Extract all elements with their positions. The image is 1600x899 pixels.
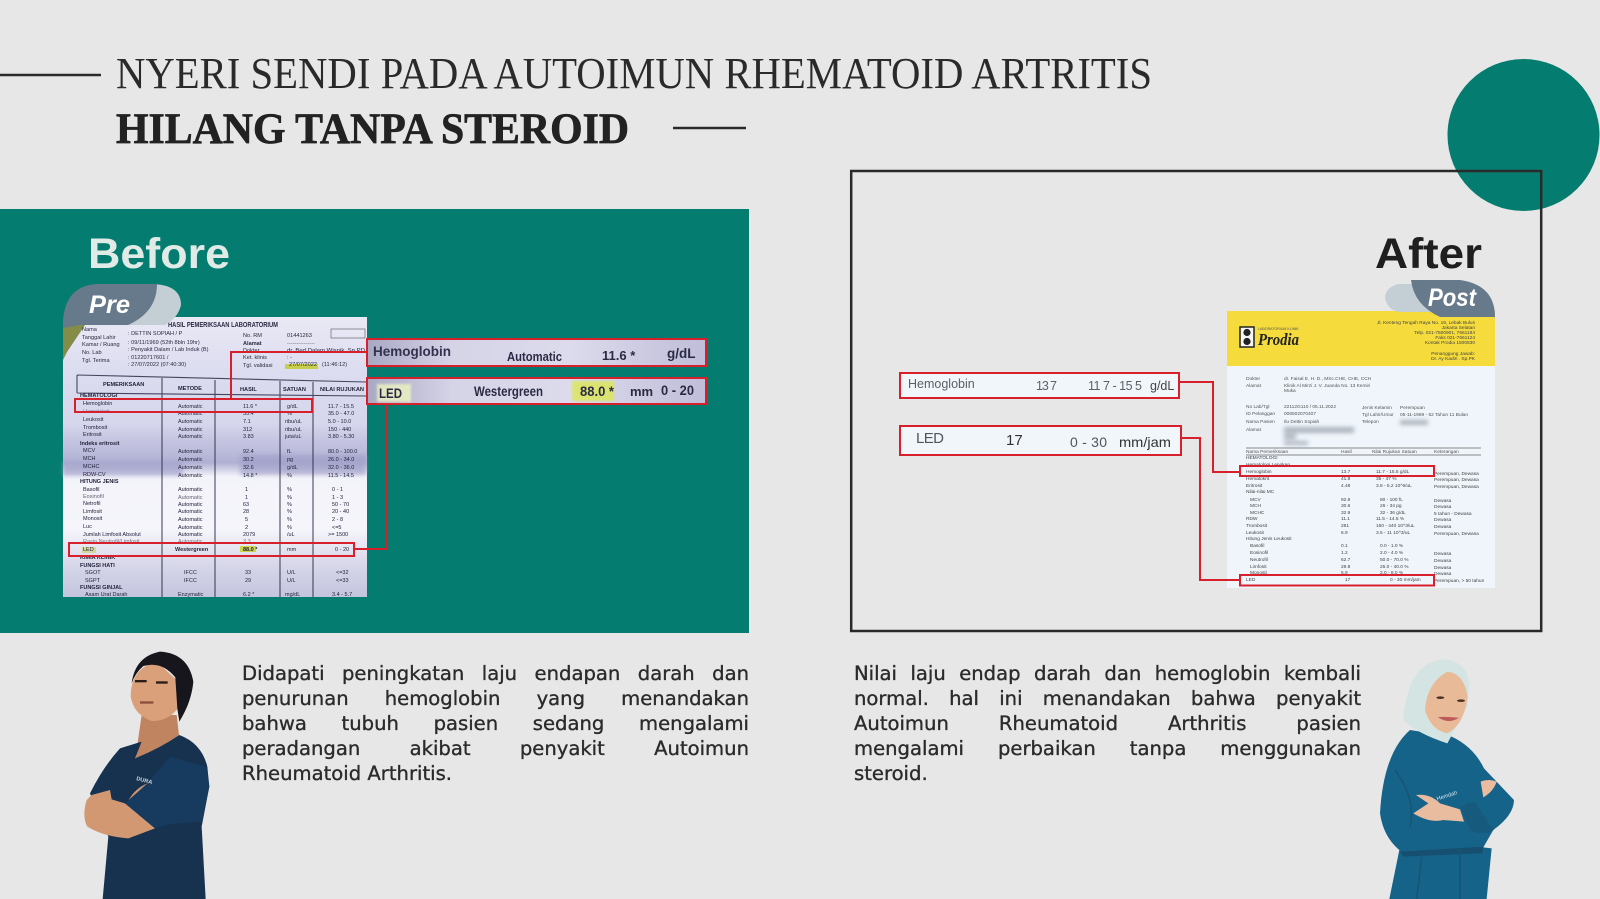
lab report rows: 2079 [243,532,255,538]
lab report rows: 5.0 - 10.0 [328,419,351,425]
callout: Hemoglobin before: 11.6 * [602,348,636,363]
lab report scan: pre: HASIL PEMERIKSAAN LABORATORIUM [168,322,278,329]
lab report rows: Automatic [178,495,203,501]
lab report rows: 30.6 [1341,503,1351,509]
lab report rows: 88.0 * [243,547,258,553]
crossed arms [84,790,155,838]
text block: after description: steroid. [854,762,928,785]
lab report rows: Basofil [83,487,100,493]
lab report scan: post: Nama Pemeriksaan [1246,449,1288,455]
lab report scan: post: Kontak Prodia 1500830 [1425,340,1475,346]
lab report scan: pre: Nama [82,327,98,333]
lab report scan: pre: Tgl. Terima [82,358,110,364]
lab report rows: Automatic [178,411,203,417]
gown folds [1395,770,1493,899]
lab report rows: Limfosit [83,509,102,515]
lab report scan: post: Jl. Kenteng Tengah Raya No. 19, Lebak Bulus [1377,320,1476,326]
lab report rows: 41.9 [1341,476,1351,482]
lab report rows: 29 [245,578,251,584]
lab report scan: pre: 01441263 [287,333,312,339]
lab report rows: HITUNG JENIS [80,479,119,485]
lab report scan: post: 006502070407 [1284,411,1316,417]
lab report rows: 1 [245,487,248,493]
lab report rows: U/L [287,570,296,576]
lab report rows: 11.7 - 15.5 [328,404,354,410]
callout: LED after: 17 [1006,432,1023,449]
decorative teal circle [1448,59,1600,211]
lab report rows: 2 [245,525,248,531]
lab report scan: pre: : 09/11/1969 (52th 8bln 19hr) [128,340,200,346]
text block: before description [242,662,749,785]
text block: before description: Rheumatoid Arthritis. [242,762,452,785]
lab report rows: 6.9 [1341,530,1348,536]
text block: after description: mengalami perbaikan tanpa menggunakan [854,737,1361,760]
lab report rows: 32.9 [1341,510,1351,516]
lab report rows [80,382,364,598]
title line 2: HILANG TANPA STEROID [116,106,629,153]
lab report rows: Dewasa [1434,504,1452,510]
lab report rows: 2.0 - 4.0 % [1380,550,1404,556]
lab report rows: % [287,411,292,417]
lab report scan: pre: : - [287,355,292,361]
lab report rows: 80.0 - 100.0 [328,449,357,455]
head [131,662,179,721]
lab report rows: FUNGSI GINJAL [80,585,123,591]
lab report scan: pre: No. Lab [82,350,102,356]
lab report rows: Perempuan, Dewasa [1434,531,1479,537]
lab report scan: pre: : 01220717601 / [128,355,169,361]
lab report rows: 3.3 [243,539,251,545]
lab report scan: post: 22112G110 / 05.11.2022 [1284,404,1336,410]
lab report rows: 63 [243,502,249,508]
text block: after description: Autoimun Rheumatoid Arthritis pasien [854,712,1361,735]
lab report scan: post: Perempuan [1400,405,1425,411]
lab report scan: pre: 27/07/2022 [289,362,317,368]
lab report scan: post: dr. Faisal E. H. D., MSc.CHE, CHE, CCH [1284,376,1372,382]
lab report rows: 17 [1345,577,1351,583]
lab report rows: METODE [178,386,202,392]
lab report rows: Perempuan, Dewasa [1434,477,1479,483]
lab report scan: post: Penanggung Jawab: [1431,351,1475,357]
hair [132,652,193,722]
lab report rows: 1.2 [1341,550,1348,556]
text block: before description: bahwa tubuh pasien sedang mengalami [242,712,749,735]
lab report rows: 11.5 - 14.5 % [1376,516,1405,522]
face [1425,672,1468,733]
lab report rows: 3.83 [243,434,254,440]
text block: after description [854,662,1361,785]
lab report scan: post: Nilai Rujukan Satuan [1372,449,1417,455]
highlight boxes and connectors: after [1179,382,1434,586]
lab report rows: juta/uL [284,434,302,440]
lab report rows: Eritrosit [1246,483,1263,489]
callout: Hemoglobin after: Hemoglobin [908,377,975,391]
tab: Post [1385,280,1495,317]
lab report scan: pre: Kamar / Ruang [82,342,120,348]
lab report scan: post: ID Pelanggan [1246,411,1275,417]
lab report rows: Trombosit [1246,523,1268,529]
lab report rows: Luc [83,524,92,530]
lab report rows: Automatic [178,517,203,523]
lab report rows: Dewasa [1434,517,1452,523]
lab report rows: Trombosit [83,425,108,431]
lab report rows: 3.6 - 11 10^3/uL [1376,530,1410,536]
lab report rows: MCHC [1250,510,1265,516]
lab report rows: 28 [243,509,249,515]
lab report rows: /uL [287,532,295,538]
callout: LED before: mm [630,384,653,399]
lab report rows: Leukosit [83,417,104,423]
lab report rows: 92.4 [243,449,254,455]
text block: before description: peradangan akibat penyakit Autoimun [242,737,749,760]
panel: before [0,209,749,633]
callout: LED after: 0 - 30 [1070,434,1107,450]
lab report scan: post: Dr. Ay Kadiri . Sp.PK [1431,356,1476,362]
lab report scan: pre: Tanggal Lahir [82,335,116,341]
lab report scan: post: 05-11-1969 - 52 Tahun 11 Bulan [1400,412,1468,418]
lab report rows: >= 1500 [328,532,348,538]
lab report rows: 3.80 - 5.30 [328,434,354,440]
lab report scan: post [1227,311,1495,588]
callout: Hemoglobin after [900,373,1179,398]
lab report rows: 11.6 * [243,404,258,410]
logo: Prodia [1240,327,1299,349]
lab report rows: 33 [245,570,251,576]
callout: Hemoglobin before [367,339,706,366]
lab report rows: 30.2 [243,457,254,463]
lab report rows: pg [287,457,293,463]
lab report rows: 0 - 1 [332,487,343,493]
lab report rows: MCHC [83,464,100,470]
lab report rows: 0.0 - 1.0 % [1380,543,1404,549]
lab report rows: 3.4 - 5.7 [332,592,352,598]
highlight boxes and connectors: before [69,352,386,556]
lab report rows: Dewasa [1434,558,1452,564]
lab report scan: pre: (11:46:12) [322,362,347,368]
lab report rows: Dewasa [1434,551,1452,557]
tab: Pre [63,284,181,328]
lab report rows: Automatic [178,427,203,433]
lab report rows: <=32 [336,570,349,576]
lab report rows: Neutrofil [1250,557,1268,563]
lab report rows: 26 - 34 pg [1380,503,1402,509]
lab report rows: IFCC [184,570,197,576]
lab report rows: LED [83,547,94,553]
lab report rows: 35.4 [243,411,254,417]
lab report rows: 26.0 - 34.0 [328,457,354,463]
callout: LED before: Westergreen [474,383,543,399]
lab report rows: 11.5 - 14.5 [328,473,354,479]
lab report scan: post: Keterangan [1434,449,1459,455]
lab report rows: 32.0 - 36.0 [328,465,354,471]
lab report rows: U/L [287,578,296,584]
lab report scan: post: Faks 021-7661124 [1435,335,1475,341]
text block: after description: Nilai laju endap darah dan hemoglobin kembali [854,662,1361,685]
lab report rows: HEMATOLOGI [80,393,118,399]
lab report scan: post: Ilu Dettin Sopiah [1284,419,1320,425]
lab report rows: Jumlah Limfosit Absolut [83,532,141,538]
lab report rows: MCH [1250,503,1261,509]
lab report rows [1246,455,1485,584]
lab report rows: g/dL [287,465,298,471]
lab report rows: Automatic [178,532,203,538]
tab: Pre: Pre [89,291,130,319]
lab report rows: Hemoglobin [83,401,112,407]
title line 1: NYERI SENDI PADA AUTOIMUN RHEMATOID ARTRITIS [116,49,1152,98]
lab report rows: 5 tahun - Dewasa [1434,511,1472,517]
lab report rows: 3.8 - 5.2 10^6/uL [1376,483,1412,489]
lab report rows: 11.7 - 15.5 g/dL [1376,469,1410,475]
person: man in navy scrubs: DURA [135,776,153,786]
lab report rows: Automatic [178,404,203,410]
callout: LED before [367,378,706,404]
table grid [77,375,366,597]
lab report rows: 35.0 - 47.0 [328,411,354,417]
lab report scan: post: Dokter [1246,376,1261,382]
lab report scan: post: No Lab/Tgl [1246,404,1269,410]
lab report rows: Automatic [178,509,203,515]
lab report scan: post: Jakarta Selatan [1442,325,1475,331]
lab report rows: Enzymatic [178,592,204,598]
lab report scan: pre: Ket. klinis [243,355,267,361]
lab report scan: pre: --------------- [287,341,315,347]
callout: Hemoglobin before: Hemoglobin [373,344,451,359]
lab report rows: Rasio Neutrofil/Limfosit [83,539,140,545]
lab report rows: 92.9 [1341,497,1351,503]
lab report scan: pre: Alamat [243,341,262,347]
lab report rows: % [287,495,292,501]
lab report rows: mm [287,547,297,553]
lab report rows: <=5 [332,525,341,531]
lab report rows: Automatic [178,487,203,493]
lab report rows: MCH [83,456,96,462]
lab report rows: Hemoglobin [1246,469,1272,475]
lab report scan: pre: : 27/07/2022 (07:40:30) [128,362,186,368]
lab report rows: Automatic [178,465,203,471]
lab report rows: Automatic [178,434,203,440]
lab report rows: LED [1246,577,1256,583]
lab report rows: Perempuan, > 50 tahun [1434,578,1485,584]
lab report rows: 11.1 [1341,516,1350,522]
lab report rows: 14.8 * [243,473,258,479]
lab report rows: Hematokrit [1246,476,1270,482]
gown [1380,730,1514,899]
lab report rows: 0 - 20 [335,547,349,553]
lab report rows: 50 - 70 [332,502,349,508]
hijab [1403,659,1469,743]
lab report rows: SGPT [85,578,101,584]
lab report rows: MCV [1250,497,1261,503]
lab report rows: 35 - 47 % [1376,476,1397,482]
lab report scan: pre: Dokter [243,348,260,354]
lab report rows: 32.6 [243,465,254,471]
torso [90,735,209,899]
lab report rows: 1 [245,495,248,501]
lab report scan: pre: Tgl. validasi [243,363,273,369]
lab report rows: % [287,487,292,493]
tab: Post: Post [1428,284,1477,312]
lab report rows: % [287,525,292,531]
lab report rows: Automatic [178,502,203,508]
lab report rows: Dewasa [1434,565,1452,571]
lab report rows: Dewasa [1434,571,1452,577]
lab report rows: mg/dL [285,592,300,598]
logo: Prodia: Prodia [1257,330,1299,349]
lab report rows: 0 - 30 mm/jam [1390,577,1421,583]
text block: after description: normal. hal ini menandakan bahwa penyakit [854,687,1361,710]
lab report rows: 13.7 [1341,469,1351,475]
lab report rows: 1 - 3 [332,495,343,501]
callout: Hemoglobin before: Automatic [507,350,562,364]
lab report rows: % [287,509,292,515]
lab report rows: Asam Urat Darah [85,592,128,598]
lab report rows: Eosinofil [83,494,104,500]
lab report rows: 6.2 * [243,592,255,598]
lab report rows: 2.0 - 8.0 % [1380,570,1404,576]
lab report rows: 5.9 [1341,570,1348,576]
lab report rows: 2 - 8 [332,517,343,523]
lab report rows: HEMATOLOGI [1246,455,1278,461]
lab report rows: fL [287,449,292,455]
logo: Prodia: LABORATORIUM KLINIK [1258,327,1299,331]
lab report rows: Monosit [83,516,103,522]
lab report rows: 0.1 [1341,543,1348,549]
lab report rows: Hematokrit [83,409,110,415]
lab report rows: 7.1 [243,419,251,425]
callout: Hemoglobin after: g/dL [1150,379,1174,393]
lab report rows: 5 [245,517,248,523]
lab report scan: post: Muka [1284,388,1296,394]
heading: Before: Before [88,230,230,278]
sleeve [125,757,209,828]
person: woman in teal gown [1380,659,1514,899]
lab report rows: Perempuan, Dewasa [1434,471,1479,477]
person: man in navy scrubs [84,652,209,899]
lab report rows: RDW [1246,516,1258,522]
lab report rows: Nilai-nilai MC [1246,489,1275,495]
lab report rows: Westergreen [175,547,209,553]
lab report rows: Eritrosit [83,432,102,438]
lab report rows: g/dL [287,404,298,410]
lab report scan: pre [63,317,367,598]
lab report rows: 150 - 440 10^3/uL [1376,523,1415,529]
lab report rows: 20 - 40 [332,509,349,515]
person: woman in teal gown: Hemdah [1436,790,1458,803]
heading: After: After [1375,230,1482,278]
lab report rows: SATUAN [283,387,306,393]
lab report scan: post: Telepon [1362,419,1379,425]
callout: LED before: LED [379,385,402,401]
hands [1413,795,1464,822]
lab report scan: pre: dr. Bed Dalam Wisnik, Sp.PD [287,348,365,354]
lab report rows: SGOT [85,570,101,576]
lab report rows: 25.0 - 40.0 % [1380,564,1409,570]
lab report rows: ribu/uL [285,419,302,425]
lab report rows: RDW-CV [83,472,106,478]
lab report rows: Automatic [178,457,203,463]
title [116,49,1152,153]
lab report rows: 29.8 [1341,564,1351,570]
lab report rows: 50.0 - 70.0 % [1380,557,1409,563]
lab report rows: Dewasa [1434,498,1452,504]
lab report rows: Dewasa [1434,524,1452,530]
lab report scan: post: Alamat [1246,427,1262,433]
callout: LED before: 88.0 * [580,383,615,399]
lab report rows: Eosinofil [1250,550,1268,556]
lab report rows: 312 [243,427,252,433]
neck [135,715,179,758]
lab report rows: Basofil [1250,543,1264,549]
callout: Hemoglobin after: 11 7 - 15 5 [1088,379,1142,393]
lab report rows: HASIL [240,387,257,393]
lab report rows: MCV [83,448,96,454]
lab report rows: NILAI RUJUKAN [320,387,364,393]
lab report scan: pre: : Penyakit Dalam / Lab Induk (B) [128,347,209,353]
lab report rows: Automatic [178,473,203,479]
lab report scan: post: Jenis Kelamin [1362,405,1392,411]
lab report rows: 4.48 [1341,483,1351,489]
lab report rows: Automatic [178,539,203,545]
lab report rows: Automatic [178,449,203,455]
sleeve [1460,802,1493,833]
callout: LED after: mm/jam [1119,434,1171,450]
lab report rows: % [287,517,292,523]
lab report scan: post: Klinik Al Mirzi J. V. Juanda No. 13 Kemiri [1284,383,1370,389]
lab report rows: Monosit [1250,570,1267,576]
callout: LED after [900,426,1181,455]
lab report rows: % [287,473,292,479]
text block: before description: penurunan hemoglobin yang menandakan [242,687,749,710]
lab report rows: 150 - 440 [328,427,351,433]
lab report rows: KIMIA KLINIK [80,555,115,561]
lab report rows: 281 [1341,523,1349,529]
lab report rows: Indeks eritrosit [80,441,120,447]
lab report scan: pre: : DETTIN SOPIAH / P [128,331,183,337]
callout: LED after: LED [916,430,944,447]
lab report rows: Netrofil [83,501,100,507]
lab report rows: Hematologi Lengkap [1246,462,1290,468]
lab report rows: Automatic [178,419,203,425]
lab report rows: PEMERIKSAAN [103,382,144,388]
lab report scan: post: Hasil [1341,449,1352,455]
lab report rows: IFCC [184,578,197,584]
callout: Hemoglobin before: g/dL [667,346,696,361]
lab report scan: post: Alamat [1246,383,1262,389]
callout: Hemoglobin after: 13 7 [1036,379,1057,393]
lab report rows: Leukosit [1246,530,1265,536]
lab report scan: pre: No. RM [243,333,262,339]
panel: after [851,171,1541,631]
lab report rows: Hitung Jenis Leukosit [1246,536,1292,542]
lab report scan: post: Nama Pasien [1246,419,1275,425]
lab report rows: Automatic [178,525,203,531]
lab report rows: % [287,502,292,508]
lab report rows: 62.7 [1341,557,1351,563]
lab report rows: ribu/uL [285,427,302,433]
lab report rows: 32 - 36 g/dL [1380,510,1406,516]
lab report rows: FUNGSI HATI [80,563,115,569]
lab report rows: Perempuan, Dewasa [1434,484,1479,490]
callout: LED before: 0 - 20 [661,382,694,398]
lab report scan: post: Telp. 021-7500901, 7661184 [1414,330,1475,336]
lab report rows: 80 - 100 fL [1380,497,1403,503]
lab report scan: post: Tgl Lahir/Umur [1362,412,1394,418]
text block: before description: Didapati peningkatan laju endapan darah dan [242,662,749,685]
lab report rows: Limfosit [1250,564,1267,570]
lab report rows: <=33 [336,578,349,584]
